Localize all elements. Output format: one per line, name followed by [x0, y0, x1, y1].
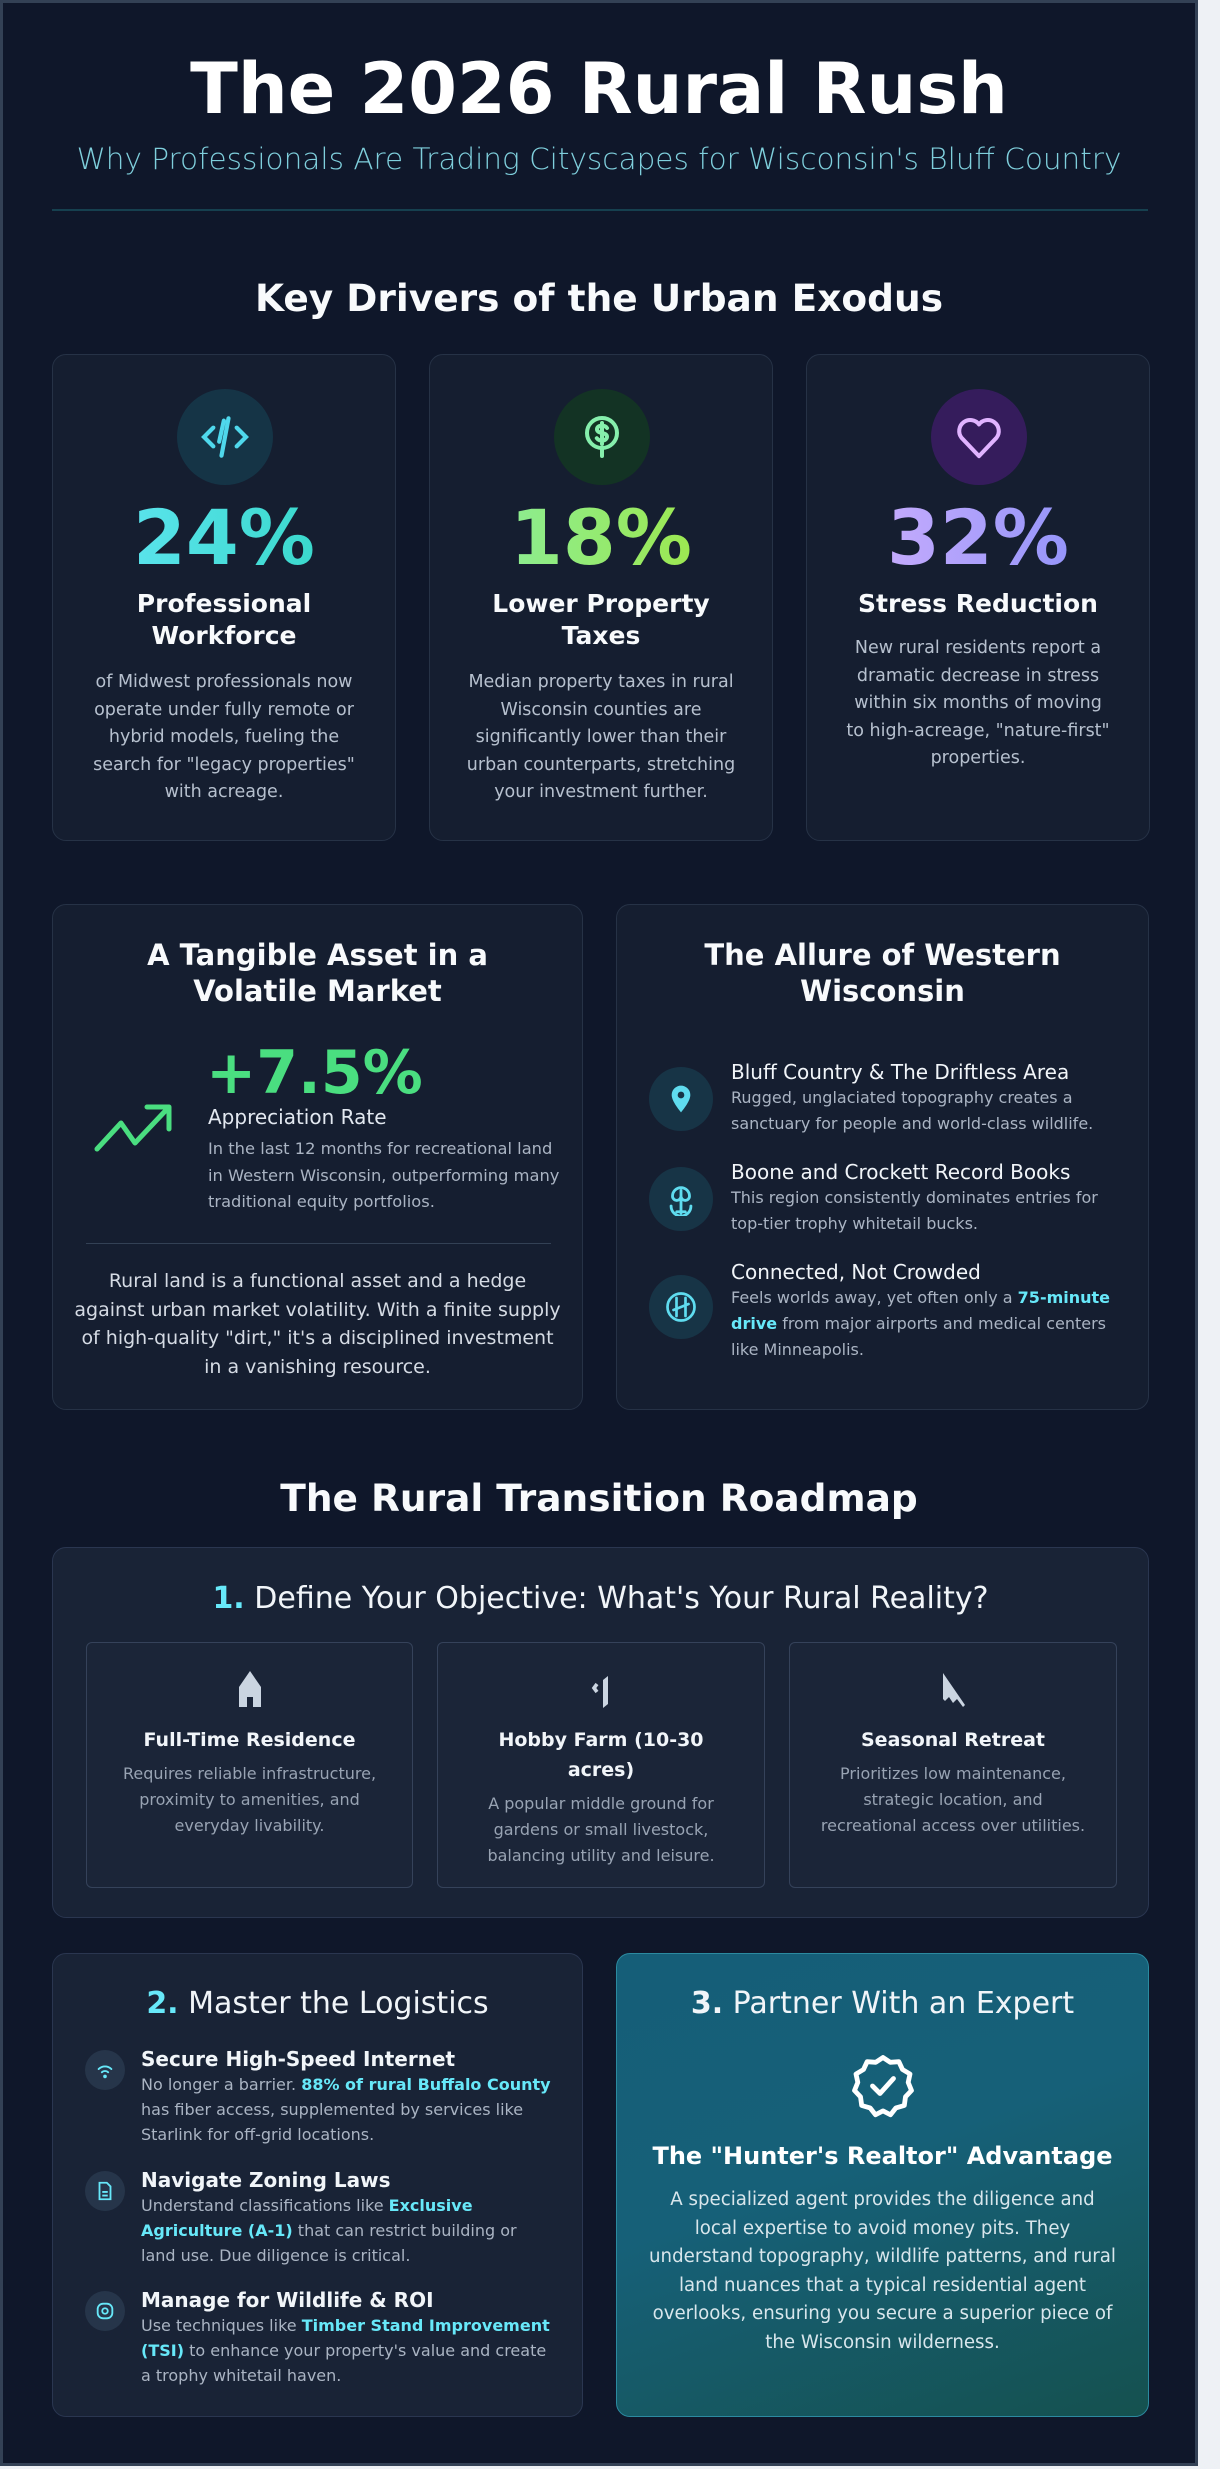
- item: zoning: [85, 2168, 517, 2265]
- icon: trend up: [94, 1104, 172, 1152]
- card: professional workforce: [52, 354, 396, 841]
- subcard: full-time residence: Full-Time Residence: [144, 1729, 355, 1751]
- icon: dollar: [554, 389, 650, 485]
- item: internet: [85, 2047, 551, 2144]
- title: Workforce: [152, 621, 296, 650]
- card: property taxes: [429, 354, 773, 841]
- item: connected: [649, 1260, 1110, 1359]
- icon: document: [85, 2171, 125, 2211]
- desc: New rural residents report a dramatic decrease in stress within six months of moving to high-acreage, "nature-first" properties.: [846, 638, 1110, 768]
- subcard: seasonal retreat: [789, 1642, 1117, 1888]
- title: The "Hunter's Realtor" Advantage: [652, 2142, 1113, 2170]
- panel: step 3 partner: [616, 1953, 1149, 2417]
- card: stress reduction: [806, 354, 1150, 841]
- item: connected: Connected, Not Crowded: [731, 1260, 981, 1284]
- title: Lower Property: [492, 589, 710, 618]
- icon: code: [177, 389, 273, 485]
- desc: Median property taxes in rural Wisconsin counties are significantly lower than their urban counterparts, stretching your investment further.: [467, 672, 735, 802]
- title: The 2026 Rural Rush: [190, 48, 1008, 130]
- desc: A specialized agent provides the diligence and: [670, 2189, 1095, 2210]
- heading: Wisconsin: [800, 974, 965, 1008]
- panel: allure of western wisconsin: [616, 904, 1149, 1410]
- heading: roadmap: The Rural Transition Roadmap: [280, 1476, 918, 1520]
- icon: heart: [931, 389, 1027, 485]
- heading: Volatile Market: [193, 974, 442, 1008]
- subcard: hobby farm: [437, 1642, 765, 1888]
- item: boone and crockett: [649, 1160, 1098, 1233]
- desc: understand topography, wildlife patterns, and rural: [649, 2246, 1116, 2267]
- item: wildlife roi: [85, 2288, 550, 2385]
- title: [137, 589, 311, 650]
- title: Taxes: [562, 621, 640, 650]
- desc: local expertise to avoid money pits. They: [695, 2218, 1070, 2239]
- icon: mountain flag: [943, 1673, 965, 1707]
- icon: plane: [649, 1275, 713, 1339]
- item: connected: Feels worlds away, yet often only a 75-minute drive from major airports and medical centers like Minneapolis.: [731, 1288, 1110, 1359]
- item: bluff country: [649, 1060, 1093, 1133]
- item: internet: Secure High-Speed Internet: [141, 2047, 455, 2071]
- item: bluff country: Bluff Country & The Driftless Area: [731, 1060, 1069, 1084]
- icon: target: [85, 2291, 125, 2331]
- subtitle: Why Professionals Are Trading Cityscapes for Wisconsin's Bluff Country: [77, 142, 1121, 176]
- item: zoning: Understand classifications like Exclusive Agriculture (A-1) that can restrict building or land use. Due diligence is critical.: [141, 2196, 517, 2265]
- icon: house: [239, 1671, 261, 1707]
- heading: [147, 938, 488, 1008]
- desc: In the last 12 months for recreational land in Western Wisconsin, outperforming many traditional equity portfolios.: [208, 1139, 559, 1211]
- label: Appreciation Rate: [208, 1105, 386, 1129]
- icon: badge check: [852, 2055, 914, 2118]
- subcard: full-time residence: [86, 1642, 413, 1888]
- icon: wifi: [85, 2050, 125, 2090]
- desc: [649, 2189, 1116, 2353]
- subcard: full-time residence: Requires reliable infrastructure, proximity to amenities, and everyday livability.: [123, 1764, 376, 1835]
- item: wildlife roi: Use techniques like Timber Stand Improvement (TSI) to enhance your property's value and create a trophy whitetail haven.: [141, 2316, 550, 2385]
- icon: antlers: [649, 1167, 713, 1231]
- stat 32%: 32%: [887, 493, 1069, 582]
- desc: of Midwest professionals now operate under fully remote or hybrid models, fueling the search for "legacy properties" with acreage.: [93, 672, 355, 802]
- heading: key drivers: Key Drivers of the Urban Exodus: [255, 276, 943, 320]
- subcard: seasonal retreat: Prioritizes low maintenance, strategic location, and recreational access over utilities.: [821, 1764, 1085, 1835]
- subcard: hobby farm: A popular middle ground for gardens or small livestock, balancing utility and leisure.: [487, 1794, 715, 1865]
- heading: 3. Partner With an Expert: [691, 1986, 1074, 2021]
- stat 32%: [807, 500, 1149, 576]
- desc: land nuances that a typical residential agent: [679, 2275, 1086, 2296]
- subcard: hobby farm: Hobby Farm (10-30: [498, 1729, 704, 1751]
- subcard: hobby farm: acres): [568, 1759, 634, 1781]
- desc: the Wisconsin wilderness.: [765, 2332, 1000, 2353]
- title: Stress Reduction: [858, 589, 1098, 618]
- heading: The Allure of Western: [704, 938, 1061, 972]
- icon: pin: [649, 1067, 713, 1131]
- panel: tangible asset: [52, 904, 583, 1410]
- stat 24%: 24%: [133, 493, 315, 582]
- subcard: seasonal retreat: Seasonal Retreat: [861, 1729, 1045, 1751]
- heading: 2. Master the Logistics: [146, 1986, 489, 2021]
- stat 18%: 18%: [510, 493, 692, 582]
- stat +7.5%: +7.5%: [206, 1038, 423, 1108]
- desc: overlooks, ensuring you secure a superior piece of: [653, 2303, 1112, 2324]
- icon: farm: [592, 1676, 608, 1708]
- item: boone and crockett: This region consistently dominates entries for top-tier trophy whitetail bucks.: [731, 1188, 1098, 1233]
- panel: step 1 define objective: [52, 1547, 1149, 1918]
- heading: [704, 938, 1061, 1008]
- item: zoning: Navigate Zoning Laws: [141, 2168, 391, 2192]
- panel: step 2 logistics: [52, 1953, 583, 2417]
- title: Professional: [137, 589, 311, 618]
- heading: 1. Define Your Objective: What's Your Rural Reality?: [212, 1581, 989, 1616]
- paragraph: Rural land is a functional asset and a hedge against urban market volatility. With a finite supply of high-quality "dirt," it's a disciplined investment in a vanishing resource.: [74, 1270, 561, 1378]
- item: wildlife roi: Manage for Wildlife & ROI: [141, 2288, 434, 2312]
- stat 24%: [53, 500, 395, 576]
- stat 18%: [430, 500, 772, 576]
- heading: A Tangible Asset in a: [147, 938, 488, 972]
- title: [492, 589, 710, 650]
- item: internet: No longer a barrier. 88% of rural Buffalo County has fiber access, supplemented by services like Starlink for off-grid locations.: [141, 2075, 551, 2144]
- item: boone and crockett: Boone and Crockett Record Books: [731, 1160, 1070, 1184]
- item: bluff country: Rugged, unglaciated topography creates a sanctuary for people and world-class wildlife.: [731, 1088, 1093, 1133]
